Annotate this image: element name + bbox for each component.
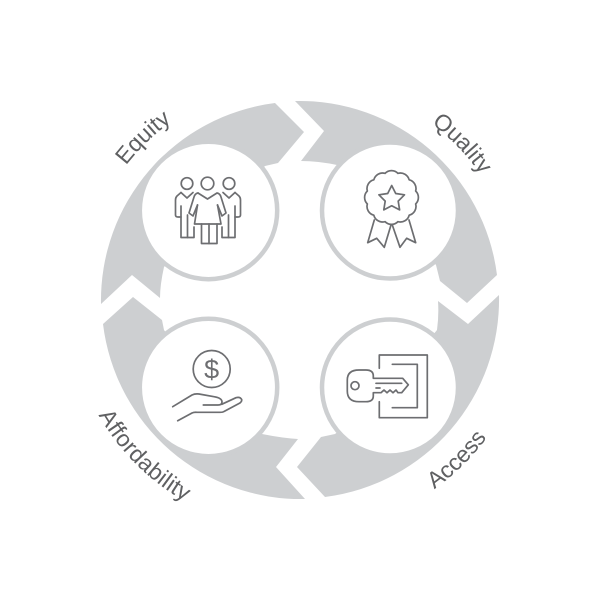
arrow: access	[297, 295, 499, 497]
arrow: equity	[101, 103, 304, 304]
arrow: affordability	[103, 297, 305, 499]
panel: equity circle	[140, 142, 277, 279]
panel: quality circle	[322, 142, 458, 278]
icon: group of people	[176, 177, 240, 244]
icon: award rosette	[365, 171, 418, 247]
label: Access: Access	[430, 432, 486, 490]
panel: access circle	[322, 320, 458, 456]
label: Quality: Quality	[435, 114, 491, 172]
panel: affordability circle	[140, 319, 277, 456]
icon: key and door	[347, 355, 427, 418]
arrow: quality	[295, 101, 497, 303]
label: Equity: Equity	[115, 112, 168, 164]
label: Affordability: Affordability	[98, 412, 191, 502]
icon: hand holding coin: $	[204, 354, 219, 384]
icon: hand holding coin	[173, 350, 242, 421]
